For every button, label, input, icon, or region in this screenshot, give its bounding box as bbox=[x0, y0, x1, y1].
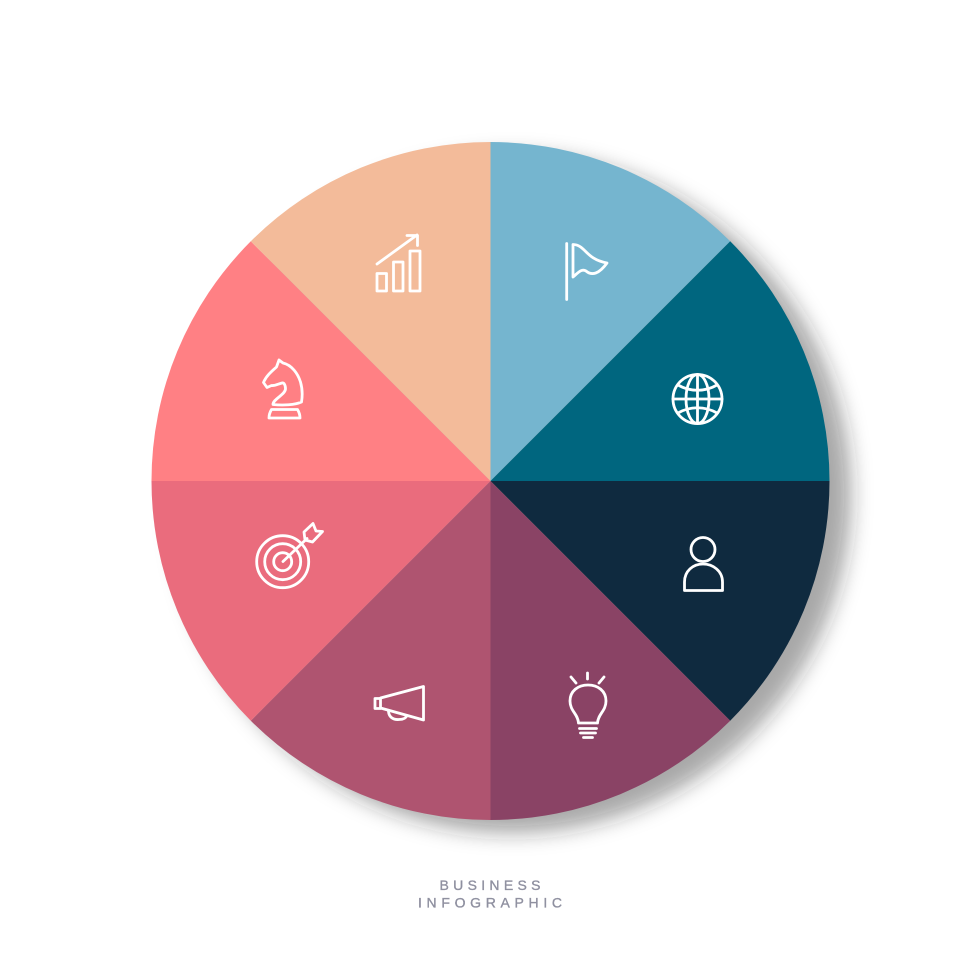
segment: peach bbox=[251, 142, 490, 481]
icon: light bulb bbox=[570, 673, 606, 738]
segment: rose bbox=[251, 481, 490, 820]
icon: megaphone bbox=[375, 686, 424, 720]
icon: target with arrow bbox=[257, 524, 322, 588]
drop shadow bbox=[173, 155, 851, 833]
segment: light blue bbox=[490, 142, 730, 481]
icon: flag bbox=[567, 244, 607, 300]
icon: person bbox=[684, 538, 722, 590]
caption bbox=[418, 877, 562, 910]
pie chart bbox=[152, 142, 830, 820]
segment: teal bbox=[490, 241, 830, 481]
caption: BUSINESS bbox=[440, 877, 540, 893]
segment: plum bbox=[490, 481, 730, 820]
segment: navy bbox=[490, 481, 830, 721]
segment: coral bbox=[152, 241, 490, 481]
caption: INFOGRAPHIC bbox=[418, 894, 562, 910]
icon: globe bbox=[673, 374, 722, 424]
icon: chess knight bbox=[264, 360, 302, 418]
segment: pink bbox=[152, 481, 490, 721]
icon: growth chart bbox=[377, 235, 420, 291]
